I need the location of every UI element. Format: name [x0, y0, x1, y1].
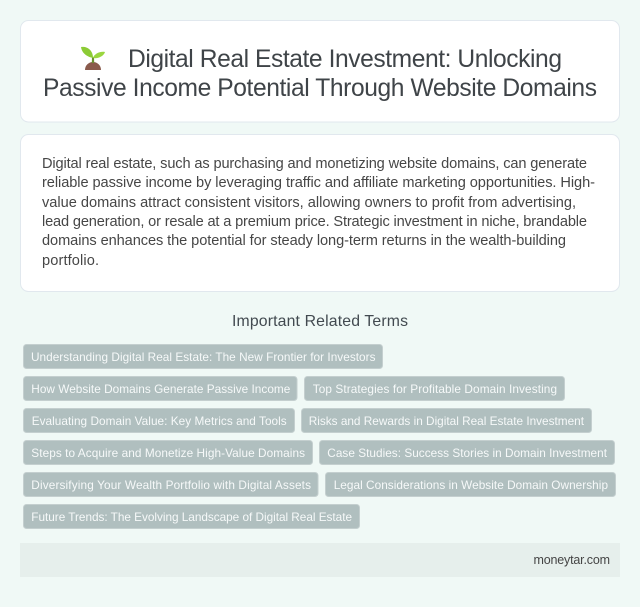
- footer: [20, 543, 620, 577]
- tag: Risks and Rewards in Digital Real Estate Investment: [309, 414, 585, 428]
- tag: [24, 504, 360, 528]
- tag: Case Studies: Success Stories in Domain Investment: [327, 446, 608, 460]
- tag: Legal Considerations in Website Domain Ownership: [334, 478, 608, 492]
- tag: Evaluating Domain Value: Key Metrics and Tools: [32, 414, 287, 428]
- tag: [24, 376, 297, 400]
- description text: reliable passive income by leveraging traffic and affiliate marketing opportunities. High-: [42, 175, 595, 191]
- description text: portfolio.: [42, 253, 99, 269]
- tag: [24, 440, 312, 464]
- description text: lead generation, or resale at a premium price. Strategic investment in niche, brandable: [42, 214, 587, 230]
- title: Digital Real Estate Investment: Unlocking: [128, 46, 562, 73]
- tag: [304, 376, 564, 400]
- panel: related term tags: [24, 344, 616, 528]
- tag: [24, 408, 294, 432]
- tag: [24, 344, 382, 368]
- description text: [42, 156, 595, 269]
- tag: Top Strategies for Profitable Domain Investing: [313, 382, 557, 396]
- tag: Steps to Acquire and Monetize High-Value Domains: [31, 446, 305, 460]
- tag: [302, 408, 592, 432]
- header panel: [20, 20, 620, 122]
- tag: Diversifying Your Wealth Portfolio with Digital Assets: [31, 478, 311, 492]
- heading: related terms: Important Related Terms: [232, 313, 408, 330]
- footer source text: moneytar.com: [534, 553, 610, 567]
- description text: value domains attract consistent visitors, allowing owners to profit from advertising,: [42, 195, 576, 211]
- description text: domains enhances the potential for steady long-term returns in the wealth-building: [42, 233, 566, 249]
- description text: Digital real estate, such as purchasing and monetizing website domains, can generate: [42, 156, 587, 172]
- icon: seedling: [81, 47, 105, 70]
- tag: Understanding Digital Real Estate: The New Frontier for Investors: [31, 350, 376, 364]
- tag: [24, 472, 318, 496]
- title: Passive Income Potential Through Website Domains: [43, 75, 597, 102]
- tag: [320, 440, 614, 464]
- title: [43, 46, 597, 102]
- panel: description: [20, 134, 620, 292]
- tag: How Website Domains Generate Passive Income: [31, 382, 291, 396]
- tag: Future Trends: The Evolving Landscape of Digital Real Estate: [31, 510, 352, 524]
- tag: [326, 472, 616, 496]
